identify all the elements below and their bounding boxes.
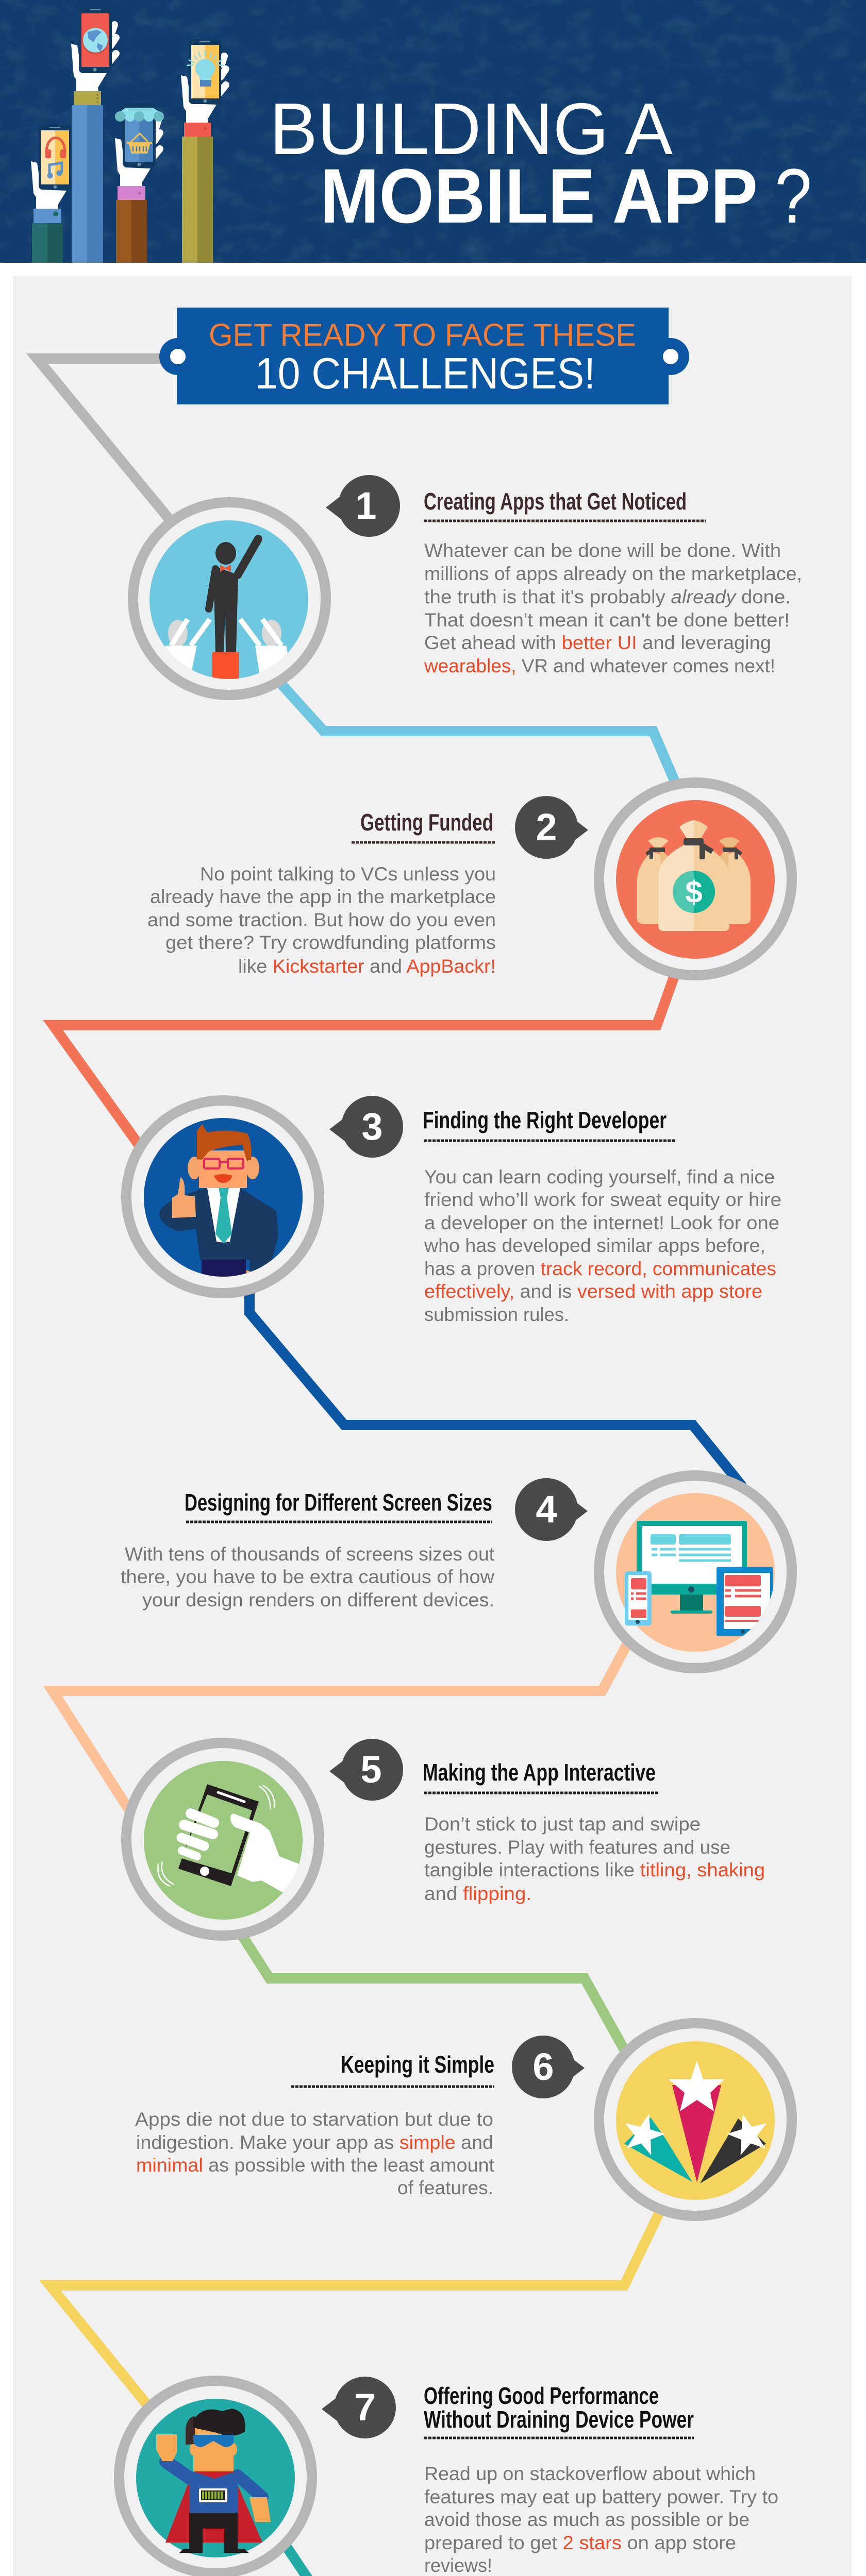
step 4 body text [121,1544,495,1611]
step 3 number badge [329,1096,403,1158]
step 6: keeping it simple [135,2023,792,2216]
step 4 body text: your design renders on different devices. [142,1589,494,1611]
step 7 number badge: 7 [354,2386,376,2429]
step 5 body text: tangible interactions like titling, shaking [424,1859,765,1880]
step 1 icon: man on podium [133,502,326,695]
step 6 heading: Keeping it Simple [341,2051,494,2078]
step 4 number badge: 4 [536,1488,557,1531]
step 1 body text: wearables, VR and whatever comes next! [424,655,775,676]
step 2: getting funded [147,783,792,977]
step 2 number badge: 2 [536,806,557,849]
step 5 body text: Don’t stick to just tap and swipe [424,1814,701,1835]
arm 3 with shop phone [115,103,164,263]
step 3 heading: Finding the Right Developer [423,1107,667,1133]
step 5 body text: and flipping. [424,1883,531,1904]
banner: get ready to face these 10 challenges [159,308,689,404]
step 2 heading: Getting Funded [360,809,493,836]
step 4: designing for different screen sizes [121,1476,792,1668]
step 2 body text: No point talking to VCs unless you [200,863,496,885]
step 6 number badge: 6 [532,2045,554,2088]
step 1 body text: the truth is that it's probably already done. [424,586,791,607]
step 4 number badge [515,1478,588,1541]
step 2 icon: money bags [599,783,792,975]
step 5: making the app interactive [126,1739,765,1936]
banner: get ready to face these 10 challenges: GET READY TO FACE THESE [209,317,636,352]
step 3 body text: who has developed similar apps before, [424,1235,765,1256]
step 7 body text: prepared to get 2 stars on app store [424,2532,736,2553]
main title: ? [775,152,812,239]
step 2 body text: like Kickstarter and AppBackr! [238,956,496,977]
step 7 body text [424,2463,778,2576]
path: step 6 to step 7 [50,2179,675,2427]
step 2 body text [147,863,496,977]
step 5 heading: Making the App Interactive [423,1759,656,1786]
step 6 number badge [512,2036,585,2098]
step 3 body text: effectively, and is versed with app store [424,1281,762,1302]
banner: get ready to face these 10 challenges: 10 CHALLENGES! [255,349,595,398]
step 3 body text [424,1166,781,1325]
step 7 heading: Without Draining Device Power [424,2406,694,2433]
path: step 3 to step 4 [249,1236,742,1486]
step 3 icon: developer with thumbs up [126,1100,319,1293]
step 6 body text [135,2109,495,2198]
step 3 body text: You can learn coding yourself, find a nice [424,1166,775,1188]
arm 4 with light bulb phone [181,39,226,263]
step 2 icon: money bags: $ [685,875,703,909]
step 2 number badge [515,796,588,859]
step 7 icon: battery superhero [119,2381,312,2573]
step 6 body text: indigestion. Make your app as simple and [136,2132,493,2153]
step 1: creating apps that get noticed [133,475,802,695]
step 7 heading [424,2382,694,2438]
step 7 body text: avoid those as much as possible or be [424,2509,750,2530]
step 3 number badge: 3 [361,1105,383,1148]
arm 2 with globe phone [71,8,116,263]
step 5 icon: hand shaking phone [126,1743,319,1936]
step 1 body text: Get ahead with better UI and leveraging [424,632,771,653]
path: step 4 to step 5 [53,1602,649,1850]
path: start to step 1 [37,359,183,536]
step 1 body text [424,540,802,676]
step 5 body text: gestures. Play with features and use [424,1837,730,1858]
step 3 body text: has a proven track record, communicates [424,1258,776,1279]
step 1 body text: millions of apps already on the marketplace, [424,563,802,584]
path: step 5 to step 6 [216,1896,665,2123]
step 4 icon: responsive devices [599,1476,792,1668]
step 5 number badge: 5 [360,1748,382,1791]
step 6 body text: Apps die not due to starvation but due to [135,2109,493,2130]
main title: BUILDING A [270,88,673,170]
main title: MOBILE APP [320,152,758,239]
step 7: offering good performance [119,2377,778,2576]
step 7 body text: reviews! [424,2555,492,2576]
step 3: finding the right developer [126,1096,781,1325]
step 7 heading: Offering Good Performance [424,2382,659,2409]
arm 1 with music phone [31,125,76,263]
step 3 body text: friend who’ll work for sweat equity or hire [424,1189,781,1210]
connector paths between steps [37,359,742,2576]
header banner [0,0,866,263]
path: step 7 to step 8 [258,2504,742,2576]
step 3 body text: a developer on the internet! Look for one [424,1212,779,1233]
step 2 body text: get there? Try crowdfunding platforms [165,932,496,953]
step 4 heading: Designing for Different Screen Sizes [185,1489,492,1516]
step 1 body text: Whatever can be done will be done. With [424,540,781,561]
step 1 number badge: 1 [355,484,377,527]
step 2 body text: and some traction. But how do you even [147,909,496,930]
path: step 2 to step 3 [53,917,695,1167]
step 6 body text: of features. [397,2177,493,2198]
step 5 body text [424,1814,765,1904]
step 1 body text: That doesn't mean it can't be done better! [424,609,790,631]
main title [270,88,812,239]
step 1 number badge [326,475,400,537]
step 4 body text: With tens of thousands of screens sizes out [125,1544,495,1565]
step 2 body text: already have the app in the marketplace [150,886,496,907]
path: step 1 to step 2 [258,658,695,829]
step 7 number badge [322,2377,396,2438]
step 6 icon: three stars [599,2023,792,2216]
step 7 body text: features may eat up battery power. Try to [424,2486,778,2507]
step 1 heading: Creating Apps that Get Noticed [424,488,687,515]
step 7 body text: Read up on stackoverflow about which [424,2463,756,2484]
step 5 number badge [329,1739,403,1801]
step 4 body text: there, you have to be extra cautious of how [121,1566,494,1587]
step 3 body text: submission rules. [424,1304,569,1325]
step 6 body text: minimal as possible with the least amount [136,2155,495,2176]
